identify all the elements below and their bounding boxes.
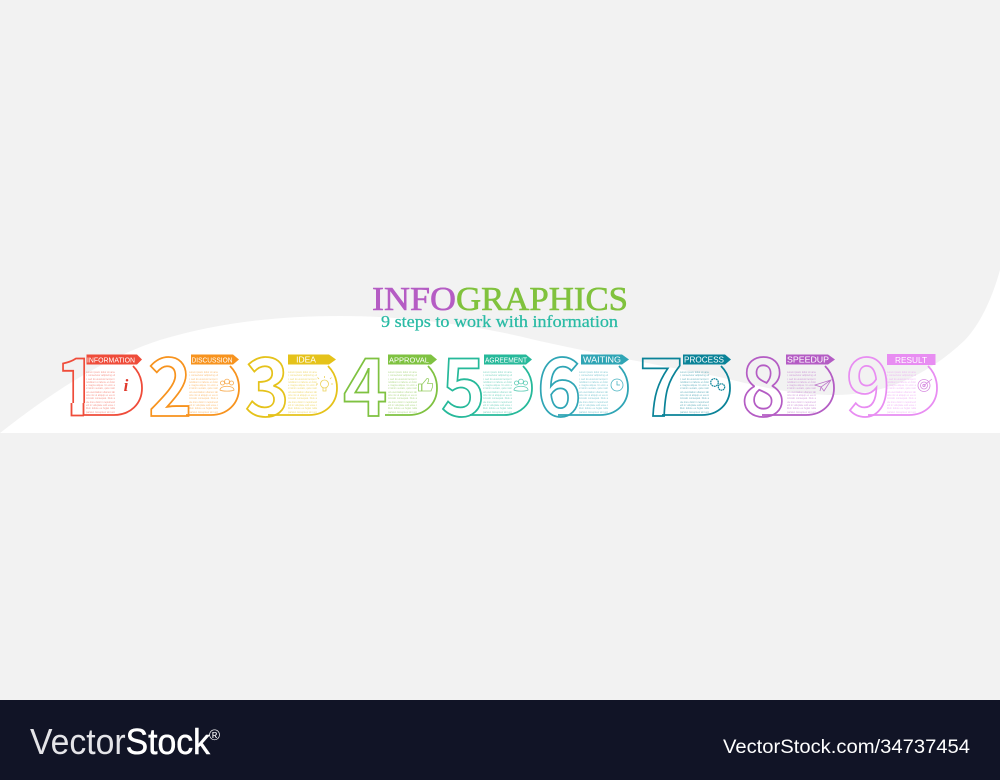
step 1: information <box>62 354 143 416</box>
outline curve <box>470 366 532 415</box>
banner label: APPROVAL <box>389 356 429 364</box>
banner label: INFORMATION <box>87 358 135 364</box>
number 3: 3 <box>245 324 289 440</box>
step 2: discussion <box>148 324 239 440</box>
footer id: VectorStock.com/34737454 <box>723 737 970 758</box>
banner <box>683 354 731 364</box>
footer logo: VectorStock <box>30 721 211 762</box>
icon: italic i: i <box>124 376 129 395</box>
banner <box>786 354 835 364</box>
banner label: RESULT <box>895 355 927 365</box>
outline curve <box>868 366 937 415</box>
step 8: speedup <box>741 324 835 440</box>
registered mark: ® <box>209 727 220 744</box>
number 7: 7 <box>639 324 683 440</box>
number 8: 8 <box>741 324 785 440</box>
number 4: 4 <box>343 324 387 440</box>
icon: light bulb <box>316 376 333 391</box>
title: GRAPHICS <box>456 281 628 318</box>
banner label: DISCUSSION <box>192 356 232 364</box>
number 2: 2 <box>148 324 192 440</box>
banner label: PROCESS <box>684 354 724 364</box>
step 6: waiting <box>537 324 629 440</box>
banner <box>388 354 437 364</box>
number 1: 1 <box>55 324 99 440</box>
banner label: IDEA <box>296 354 316 364</box>
number 6: 6 <box>537 324 581 440</box>
title <box>372 281 628 318</box>
number 1 stem foot <box>72 403 84 416</box>
title: INFO <box>372 281 456 318</box>
step 7: process <box>639 324 731 440</box>
white wave background <box>0 270 1000 433</box>
outline curve <box>385 366 437 415</box>
icon: paper plane <box>815 380 831 391</box>
banner label: WAITING <box>583 354 621 364</box>
banner label: SPEEDUP <box>787 354 829 364</box>
banner <box>484 354 532 364</box>
step 3: idea <box>245 324 337 440</box>
outline curve <box>268 366 337 415</box>
subtitle: 9 steps to work with information <box>381 312 618 331</box>
banner <box>86 354 142 364</box>
icon: thumbs up <box>418 378 432 391</box>
outline curve <box>186 366 239 415</box>
banner label: AGREEMENT <box>485 356 527 364</box>
icon: gears <box>711 379 725 390</box>
icon: people <box>514 379 528 391</box>
step 4: approval <box>343 324 437 440</box>
outline curve <box>558 366 628 415</box>
banner <box>288 354 336 364</box>
step 5: agreement <box>441 324 532 440</box>
step 9: result <box>846 324 937 440</box>
outline curve <box>84 366 142 415</box>
icon: clock <box>611 379 623 391</box>
icon: target <box>918 379 932 392</box>
icon: people <box>220 379 234 391</box>
number 5: 5 <box>441 324 485 440</box>
banner <box>887 354 936 365</box>
number 9: 9 <box>846 324 890 440</box>
outline curve <box>762 366 834 415</box>
footer bar <box>0 700 1000 780</box>
banner <box>191 354 239 364</box>
outline curve <box>662 366 730 415</box>
banner <box>581 354 629 364</box>
